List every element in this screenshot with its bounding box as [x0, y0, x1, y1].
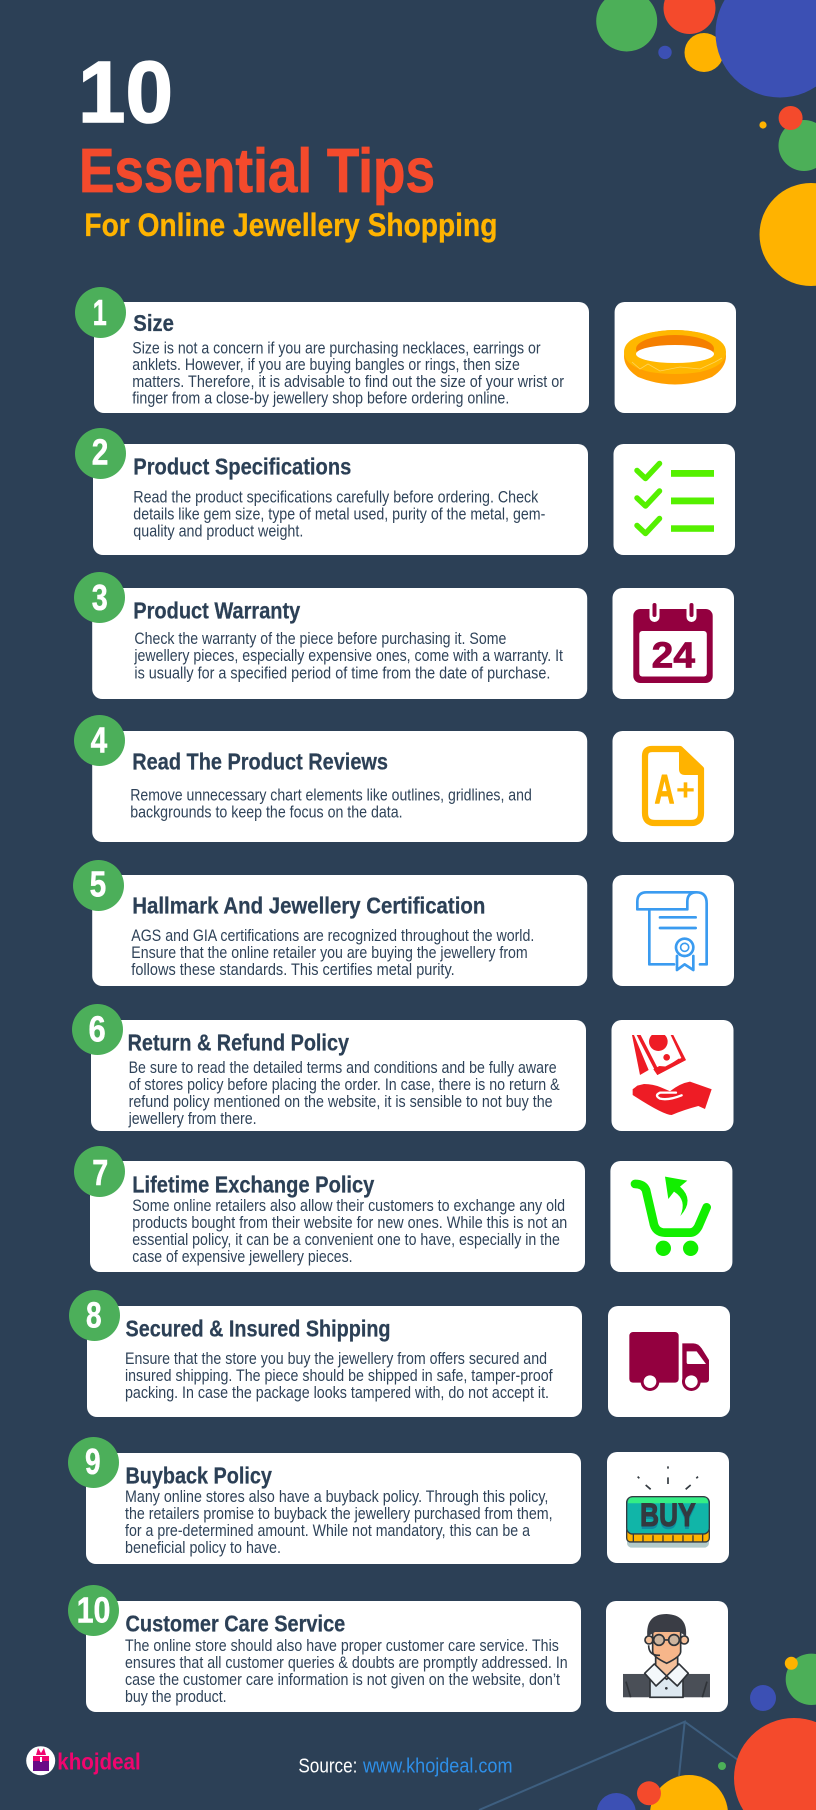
icon: buy button: BUY [640, 1500, 696, 1536]
panel: tip 4 read the product reviews: backgrounds to keep the focus on the data. [130, 803, 403, 821]
panel: tip 2 product specifications [75, 428, 588, 555]
panel: tip 8 secured and insured shipping [69, 1290, 582, 1417]
icon: graded document [612, 731, 734, 842]
panel: tip 4 read the product reviews: 4 [91, 720, 107, 761]
icon: checklist [614, 444, 735, 555]
icon: graded document: A [654, 766, 674, 812]
panel: tip 10 customer care service: 10 [77, 1590, 110, 1631]
panel: tip 3 product warranty: is usually for a specified period of time from the date of purchase. [134, 664, 550, 682]
icon: buy button [607, 1452, 729, 1563]
icon: calendar [612, 588, 734, 699]
title: Essential Tips [79, 137, 435, 206]
panel: tip 5 hallmark and jewellery certification: AGS and GIA certifications are recognized throughout the world. [131, 927, 534, 945]
panel: tip 9 buyback policy [68, 1437, 581, 1564]
icon: certificate scroll [612, 875, 734, 986]
panel: tip 4 read the product reviews: Remove unnecessary chart elements like outlines, gridlines, and [130, 786, 532, 804]
panel: tip 7 lifetime exchange policy: 7 [92, 1152, 108, 1193]
panel: tip 5 hallmark and jewellery certification: follows these standards. This certifies metal purity. [131, 961, 455, 979]
panel: tip 7 lifetime exchange policy [74, 1146, 585, 1272]
panel: tip 9 buyback policy: Many online stores also have a buyback policy. Through this policy, [125, 1488, 548, 1506]
panel: tip 10 customer care service: ensures that all customer queries & doubts are promptly addressed. In [125, 1654, 568, 1672]
panel: tip 3 product warranty [74, 572, 587, 699]
panel: tip 6 return and refund policy: 6 [88, 1009, 106, 1050]
logo: khojdeal [26, 1746, 141, 1775]
panel: tip 3 product warranty: Product Warranty [133, 597, 300, 623]
logo: khojdeal: khojdeal [57, 1748, 141, 1774]
panel: tip 10 customer care service [68, 1585, 581, 1712]
panel: tip 7 lifetime exchange policy: Lifetime Exchange Policy [132, 1172, 374, 1198]
panel: tip 1 size: Size [133, 310, 174, 336]
panel: tip 8 secured and insured shipping: Ensure that the store you buy the jewellery from offers secured and [125, 1350, 547, 1368]
panel: tip 2 product specifications: Product Specifications [133, 453, 351, 479]
panel: tip 7 lifetime exchange policy: essential policy, it can be a convenient one to have, especially in the [132, 1231, 560, 1249]
source line [298, 1755, 512, 1777]
panel: tip 8 secured and insured shipping: packing. In case the package looks tampered with, do not accept it. [125, 1384, 549, 1402]
panel: tip 5 hallmark and jewellery certification: 5 [90, 864, 106, 905]
panel: tip 5 hallmark and jewellery certification [73, 860, 587, 986]
title [78, 44, 497, 243]
panel: tip 2 product specifications: quality and product weight. [133, 522, 303, 540]
panel: tip 5 hallmark and jewellery certification: Ensure that the online retailer you are buying the jewellery from [131, 944, 528, 962]
icon: gold ring [615, 302, 736, 413]
panel: tip 7 lifetime exchange policy: products bought from their website for new ones. While this is not an [132, 1214, 567, 1232]
panel: tip 1 size: matters. Therefore, it is advisable to find out the size of your wrist or [132, 373, 565, 391]
panel: tip 10 customer care service: The online store should also have proper customer care service. This [125, 1637, 559, 1655]
icon: calendar: 24 [652, 634, 695, 676]
panel: tip 1 size: anklets. However, if you are buying bangles or rings, then size [132, 356, 520, 374]
source line: Source: [298, 1755, 357, 1777]
panel: tip 6 return and refund policy: Be sure to read the detailed terms and conditions and be fully aware [129, 1059, 557, 1077]
panel: tip 6 return and refund policy: jewellery from there. [128, 1110, 257, 1128]
panel: tip 7 lifetime exchange policy: Some online retailers also allow their customers to exchange any old [132, 1197, 565, 1215]
panel: tip 8 secured and insured shipping: 8 [86, 1294, 102, 1335]
panel: tip 6 return and refund policy [72, 1004, 586, 1131]
icon: customer care agent [606, 1601, 728, 1712]
panel: tip 1 size [75, 287, 589, 413]
panel: tip 9 buyback policy: for a pre-determined amount. While not mandatory, this can be a [125, 1522, 531, 1540]
panel: tip 3 product warranty: jewellery pieces, especially expensive ones, come with a warranty. It [134, 647, 563, 665]
panel: tip 8 secured and insured shipping: Secured & Insured Shipping [126, 1315, 390, 1341]
title: For Online Jewellery Shopping [84, 207, 497, 243]
panel: tip 10 customer care service: Customer Care Service [126, 1610, 345, 1636]
panel: tip 6 return and refund policy: Return & Refund Policy [128, 1030, 349, 1056]
decorative circles bottom right [597, 1654, 816, 1810]
panel: tip 1 size: Size is not a concern if you are purchasing necklaces, earrings or [132, 339, 541, 357]
panel: tip 10 customer care service: case the customer care information is not given on the website, don’t [125, 1671, 560, 1689]
panel: tip 1 size: finger from a close-by jewellery shop before ordering online. [132, 390, 509, 408]
panel: tip 2 product specifications: details like gem size, type of metal used, purity of the metal, gem- [133, 505, 545, 523]
panel: tip 5 hallmark and jewellery certification: Hallmark And Jewellery Certification [132, 893, 485, 919]
decorative geometry lines bottom [479, 1722, 738, 1810]
panel: tip 6 return and refund policy: of stores policy before placing the order. In case, there is no return & [129, 1076, 560, 1094]
panel: tip 3 product warranty: 3 [92, 577, 108, 618]
panel: tip 8 secured and insured shipping: insured shipping. The piece should be shipped in safe, tamper-proof [125, 1367, 553, 1385]
icon: money in hand [612, 1020, 734, 1131]
title: 10 [78, 44, 173, 141]
panel: tip 9 buyback policy: 9 [85, 1441, 101, 1482]
panel: tip 4 read the product reviews [74, 715, 587, 842]
panel: tip 2 product specifications: 2 [92, 431, 108, 472]
panel: tip 9 buyback policy: Buyback Policy [126, 1462, 272, 1488]
icon: graded document: + [676, 774, 695, 807]
icon: exchange cart [610, 1161, 732, 1272]
panel: tip 7 lifetime exchange policy: case of expensive jewellery pieces. [132, 1248, 353, 1266]
panel: tip 2 product specifications: Read the product specifications carefully before ordering. Check [133, 488, 539, 506]
icon: delivery truck [608, 1306, 730, 1417]
panel: tip 9 buyback policy: the retailers promise to buyback the jewellery purchased from them, [125, 1505, 553, 1523]
icon: buy button: BUY [640, 1497, 696, 1533]
source line: www.khojdeal.com [362, 1755, 512, 1777]
panel: tip 10 customer care service: buy the product. [125, 1688, 227, 1706]
panel: tip 9 buyback policy: beneficial policy to have. [125, 1539, 281, 1557]
panel: tip 3 product warranty: Check the warranty of the piece before purchasing it. Some [134, 630, 506, 648]
panel: tip 1 size: 1 [93, 292, 107, 333]
panel: tip 4 read the product reviews: Read The Product Reviews [132, 748, 388, 774]
panel: tip 6 return and refund policy: refund policy mentioned on the website, it is sensible to not buy the [129, 1093, 553, 1111]
decorative circles top right [596, 0, 816, 286]
